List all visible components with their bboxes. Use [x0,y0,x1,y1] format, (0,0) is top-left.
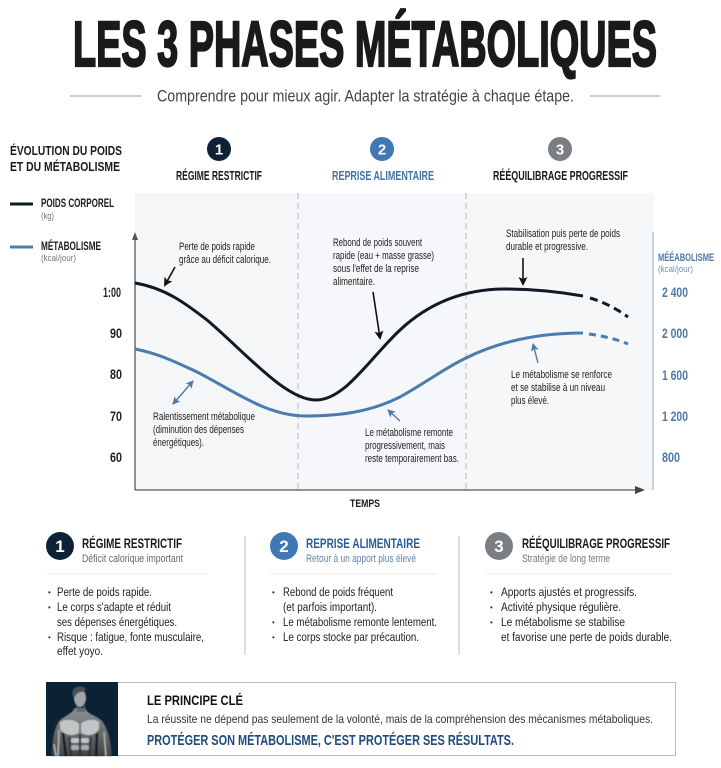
bullet list: • [48,603,51,612]
annotation: perte de poids [165,241,271,285]
annotation: rebond de poids: sous l'effet de la reprise [333,263,419,275]
annotation: perte de poids: grâce au déficit calorique. [179,254,271,266]
bullet list: • [490,618,493,627]
bullet list: ses dépenses énergétiques. [57,615,177,629]
bullet list: • [272,588,275,597]
y axis metabolism labels: 1 600 [662,368,688,383]
panel: régime restrictif: RÉGIME RESTRICTIF [82,535,182,551]
annotation: stabilisation: Stabilisation puis perte de poids [506,228,620,240]
annotation: métabolisme remonte: progressivement, mais [365,440,445,452]
bullet list: • [490,603,493,612]
phase 2 header: 2 [378,142,386,158]
bullet list: Perte de poids rapide. [57,585,152,599]
y axis metabolism labels: 1 200 [662,409,688,424]
bullet list: effet yoyo. [57,644,103,658]
bullet list: Apports ajustés et progressifs. [501,585,637,599]
bullet list: Le métabolisme remonte lentement. [283,615,437,629]
phase 1 header: 1 [215,142,223,158]
bullet list: et favorise une perte de poids durable. [501,630,672,644]
chart [103,193,714,510]
annotation: rebond de poids [333,237,434,338]
annotation: rebond de poids: alimentaire. [333,276,375,288]
annotation: métabolisme remonte: reste temporairement bas. [365,453,459,465]
y axis metabolism labels: 2 400 [662,285,688,300]
phase 3 header: RÉÉQUILIBRAGE PROGRESSIF [493,168,628,183]
y axis weight labels: 1:00 [103,285,121,300]
y axis weight labels [103,285,122,465]
annotation: perte de poids: Perte de poids rapide [179,241,255,253]
phase 2 header: REPRISE ALIMENTAIRE [332,168,434,183]
legend: métabolisme: MÉTABOLISME [41,240,101,253]
phase 1 header [176,137,262,183]
annotation: stabilisation [506,228,620,284]
panel: rééquilibrage progressif: 3 [494,537,504,556]
phase 2 header [332,137,434,183]
bullet list: • [272,618,275,627]
phase 3 header: 3 [556,142,564,158]
bullet list: • [272,633,275,642]
bullet list: Risque : fatigue, fonte musculaire, [57,630,204,644]
annotation: ralentissement: énergétiques). [153,437,204,449]
panel: reprise alimentaire: REPRISE ALIMENTAIRE [306,535,420,551]
y axis weight labels: 80 [110,367,122,382]
bullet list: Le corps stocke par précaution. [283,630,419,644]
callout: le principe clé: PROTÉGER SON MÉTABOLISME, C'EST PROTÉGER SES RÉSULTATS. [147,732,514,749]
axes [132,232,653,494]
bullet list: • [48,588,51,597]
legend: poids corporel [10,198,114,222]
chart heading: ÉVOLUTION DU POIDS [10,143,122,158]
annotation: stabilisation: durable et progressive. [506,241,588,253]
y axis weight labels: 70 [110,409,122,424]
annotation: rebond de poids: rapide (eau + masse grasse) [333,250,434,262]
bullet list: Rebond de poids fréquent [283,585,393,599]
annotation: métabolisme remonte [365,410,459,465]
bullet list [272,585,437,644]
metabolism curve [135,333,628,416]
annotation: métabolisme renforcé [511,344,612,407]
annotation: métabolisme renforcé: plus élevé. [511,395,549,407]
legend: poids corporel: (kg) [41,211,54,222]
annotation: métabolisme remonte: Le métabolisme remonte [365,427,453,439]
phase 3 header [493,137,628,183]
subtitle: Comprendre pour mieux agir. Adapter la stratégie à chaque étape. [157,88,574,106]
bullet list: Activité physique régulière. [501,600,621,614]
annotation: ralentissement: Ralentissement métabolique [153,411,255,423]
annotation: ralentissement [153,381,255,449]
chart background [135,193,654,490]
bullet list [48,585,204,658]
bullet list: Le métabolisme se stabilise [501,615,625,629]
panel: régime restrictif: 1 [55,537,65,556]
y axis metabolism labels: 800 [662,450,680,465]
bullet list: Le corps s'adapte et réduit [57,600,171,614]
bullet list [490,585,672,644]
annotation: ralentissement: (diminution des dépenses [153,424,244,436]
panel: reprise alimentaire [270,532,437,644]
y axis weight labels: 90 [110,326,122,341]
bullet list: • [490,588,493,597]
bullet list: (et parfois important). [283,600,377,614]
y axis weight labels: 60 [110,450,122,465]
callout: le principe clé: LE PRINCIPE CLÉ [147,693,243,708]
callout: le principe clé [46,682,676,756]
panel: reprise alimentaire: 2 [279,537,289,556]
y axis metabolism labels [658,251,714,465]
chart heading [10,143,122,174]
phase 1 header: RÉGIME RESTRICTIF [176,168,262,183]
legend: métabolisme [10,240,101,264]
weight curve [135,283,628,400]
x axis label: TEMPS [350,498,380,510]
panel: rééquilibrage progressif: Stratégie de long terme [522,553,610,565]
annotation: métabolisme renforcé: Le métabolisme se renforce [511,369,612,381]
annotation: métabolisme renforcé: et se stabilise à un niveau [511,382,605,394]
panel: régime restrictif: Déficit calorique important [82,553,183,565]
legend: poids corporel: POIDS CORPOREL [41,198,114,210]
icon: muscular man [46,682,118,756]
y axis metabolism labels: 2 000 [662,326,688,341]
panel: rééquilibrage progressif [485,532,672,644]
bullet list: • [48,633,51,642]
legend: métabolisme: (kcal/jour) [41,253,76,264]
panel: reprise alimentaire: Retour à un apport plus élevé [306,553,416,565]
panel: régime restrictif [46,532,208,658]
chart heading: ET DU MÉTABOLISME [10,159,120,174]
annotation: rebond de poids: Rebond de poids souvent [333,237,423,249]
callout: le principe clé: La réussite ne dépend pas seulement de la volonté, mais de la compréhension des mécanismes métaboliques. [147,712,653,726]
y axis metabolism labels: (kcal/jour) [658,264,693,275]
